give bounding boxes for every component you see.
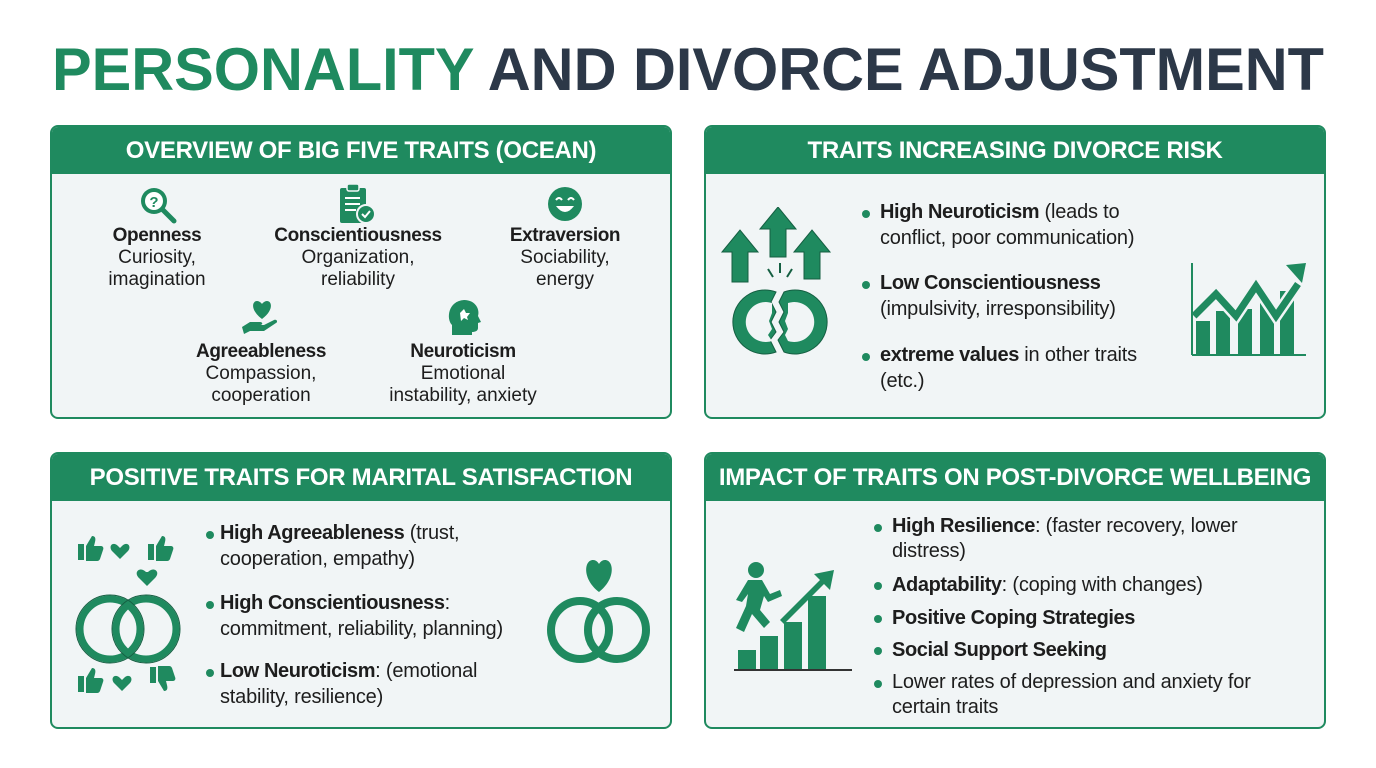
heading: positive	[52, 454, 670, 501]
bullets: risk: High Neuroticism (leads to	[880, 201, 1119, 223]
icon: heart in hand	[242, 301, 277, 334]
icon: magnifier: ?	[149, 194, 159, 211]
text: neuroticism: Neuroticism	[410, 341, 516, 362]
bullets: positive: Low Neuroticism: (emotional	[220, 660, 477, 682]
panel: divorce risk	[704, 125, 1326, 419]
panel: post-divorce wellbeing	[704, 452, 1326, 729]
bullets: positive	[206, 522, 503, 708]
icon: thumbs and rings	[76, 536, 180, 693]
bullets: risk: Low Conscientiousness	[880, 272, 1101, 294]
panel: overview	[50, 125, 672, 419]
heading: overview: OVERVIEW OF BIG FIVE TRAITS (OCEAN)	[126, 137, 596, 164]
text: neuroticism: instability, anxiety	[389, 385, 537, 406]
bullets: risk: (etc.)	[880, 370, 924, 392]
bullets: wellbeing: Social Support Seeking	[892, 639, 1107, 661]
text: agreeableness: Compassion,	[206, 363, 316, 384]
bullets: wellbeing: distress)	[892, 540, 966, 562]
text: openness: Curiosity,	[118, 247, 196, 268]
heading: overview	[52, 127, 670, 174]
text: neuroticism: Emotional	[421, 363, 505, 384]
icon: person climbing chart	[734, 562, 852, 671]
text: openness: imagination	[108, 269, 206, 290]
text: conscientiousness: Organization,	[301, 247, 414, 268]
text: extraversion	[510, 225, 620, 290]
bullets: wellbeing	[874, 515, 1251, 718]
bullets: wellbeing: certain traits	[892, 696, 998, 718]
bullets: positive: High Conscientiousness:	[220, 592, 450, 614]
heading: risk	[706, 127, 1324, 174]
heading: risk: TRAITS INCREASING DIVORCE RISK	[807, 137, 1223, 164]
icon: clipboard	[340, 184, 374, 223]
bullets: risk: (impulsivity, irresponsibility)	[880, 298, 1116, 320]
bullets: risk	[862, 201, 1137, 392]
bullets: positive: commitment, reliability, planning)	[220, 618, 503, 640]
text: agreeableness	[196, 341, 326, 406]
bullets: wellbeing: Adaptability: (coping with changes)	[892, 574, 1203, 596]
text: conscientiousness: Conscientiousness	[274, 225, 442, 246]
text: extraversion: Extraversion	[510, 225, 620, 246]
text: extraversion: energy	[536, 269, 594, 290]
text: extraversion: Sociability,	[520, 247, 610, 268]
text: conscientiousness	[274, 225, 442, 290]
text: neuroticism	[389, 341, 537, 406]
bullets: positive: stability, resilience)	[220, 686, 383, 708]
panel: positive traits	[50, 452, 672, 729]
icon: rings with heart	[547, 560, 650, 663]
bullets: risk: conflict, poor communication)	[880, 227, 1134, 249]
text: openness: Openness	[113, 225, 201, 246]
icon: head	[448, 300, 481, 335]
icon: smiley	[548, 187, 582, 221]
icon: rising chart	[1191, 263, 1306, 356]
icon: magnifier	[141, 188, 176, 224]
bullets: positive: cooperation, empathy)	[220, 548, 415, 570]
text: conscientiousness: reliability	[321, 269, 395, 290]
bullets: wellbeing: High Resilience: (faster recovery, lower	[892, 515, 1237, 537]
text: openness	[108, 225, 206, 290]
bullets: wellbeing: Positive Coping Strategies	[892, 607, 1135, 629]
heading: positive: POSITIVE TRAITS FOR MARITAL SATISFACTION	[90, 464, 632, 491]
text: agreeableness: Agreeableness	[196, 341, 326, 362]
bullets: wellbeing: Lower rates of depression and anxiety for	[892, 671, 1251, 693]
icon: broken rings with arrows	[721, 207, 831, 354]
heading: wellbeing	[706, 454, 1324, 501]
bullets: risk: extreme values in other traits	[880, 344, 1137, 366]
text: agreeableness: cooperation	[211, 385, 311, 406]
bullets: positive: High Agreeableness (trust,	[220, 522, 459, 544]
title: PERSONALITY AND DIVORCE ADJUSTMENT	[52, 36, 1324, 103]
heading: wellbeing: IMPACT OF TRAITS ON POST-DIVORCE WELLBEING	[719, 464, 1311, 491]
